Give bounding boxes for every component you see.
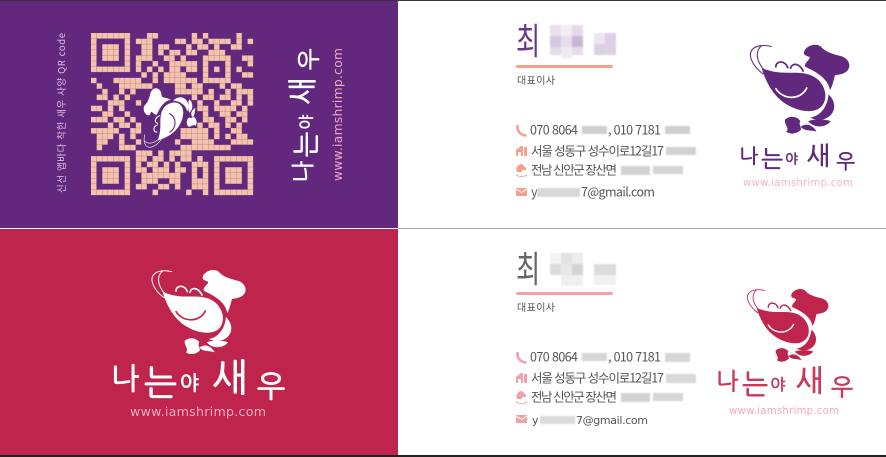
panel: purple QR card [0,1,398,228]
bottom edge [0,455,886,457]
brand name: 새 [796,366,824,396]
phone numbers [530,346,690,366]
vertical brand name: 는 [292,132,319,157]
job title: 대표이사 [517,299,555,314]
brand name: 는 [144,366,177,401]
url: www.iamshrimp.com [743,178,853,189]
vertical brand name: 야 [299,114,315,129]
brand name: 우 [836,151,855,171]
vertical brand name: 새 [287,77,317,105]
icon: farm [516,164,527,177]
logo: white shrimp [152,270,246,354]
phone numbers: , 010 7181 [608,346,661,366]
panel: red contact card [398,229,886,455]
email: 7@gmail.com [581,182,655,200]
vertical brand name: 나 [291,161,315,183]
address 1: 서울 성동구 성수이로12길17 [531,368,664,386]
email: 7@gmail.com [576,414,648,427]
top edge [0,0,886,2]
brand name: 새 [806,142,830,168]
logo: red shrimp [747,289,828,362]
name [516,13,616,65]
name: 최 [516,241,540,293]
brand name: 야 [770,377,785,393]
brand name: 나 [739,146,758,166]
job title: 대표이사 [517,72,555,87]
address 2: 전남 신안군 장산면 [531,386,617,406]
logo: purple shrimp [750,45,849,134]
email [532,414,648,427]
address 2 [531,160,683,178]
phone numbers [530,120,690,138]
phone numbers: 070 8064 [530,346,578,366]
url: www.iamshrimp.com [729,406,839,417]
name underline [516,292,613,295]
name: 최 [516,13,540,65]
icon: mail [516,188,527,196]
panel: purple contact card [398,1,886,228]
name underline [516,65,613,68]
icon: shrimp logo in QR [144,88,197,147]
name [516,241,616,293]
divider between rows [398,228,886,229]
address 2: 전남 신안군 장산면 [531,160,617,178]
email: y [532,414,539,427]
QR code [91,33,253,195]
brand name: 나 [111,364,139,394]
url: www.iamshrimp.com [130,404,266,419]
vertical url: www.iamshrimp.com [331,48,345,181]
panel: red logo card [0,229,398,455]
brand name: 는 [742,370,768,398]
brand name: 우 [831,376,853,400]
small vertical caption: 신선 앱바다 착한 새우 사양 QR code [54,33,68,193]
brand name: 야 [180,373,199,393]
phone numbers: , 010 7181 [608,120,661,138]
brand name: 야 [785,153,798,166]
vertical brand name: 우 [298,48,321,70]
phone numbers: 070 8064 [530,120,578,138]
brand name: 는 [761,148,783,171]
brand name: 우 [257,372,285,402]
email: y [531,182,538,200]
icon: mail [516,415,527,423]
address 1: 서울 성동구 성수이로12길17 [531,140,664,160]
email [531,182,655,200]
icon: phone [517,353,526,362]
brand name: 나 [716,369,738,393]
brand name: 새 [212,359,248,397]
address 2 [531,386,683,406]
icon: phone [517,126,526,136]
icon: farm [516,391,527,404]
icon: house [516,373,527,383]
icon: house [516,146,527,156]
